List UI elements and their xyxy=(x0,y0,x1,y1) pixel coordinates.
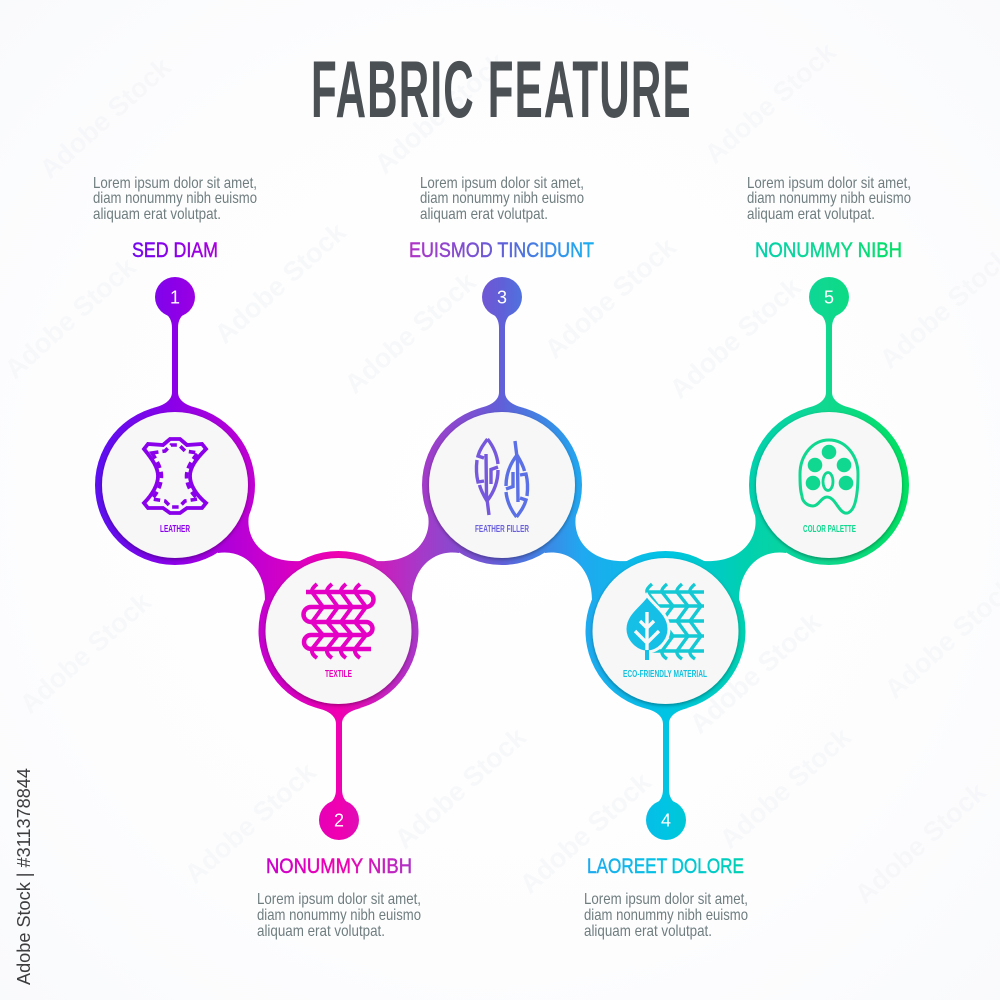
stock credit: Adobe Stock | #311378844 xyxy=(13,768,34,985)
heading 5: NONUMMY NIBH xyxy=(755,238,902,262)
icon: eco-friendly weave and leaf xyxy=(625,584,704,660)
stock watermarks: Adobe Stock xyxy=(389,721,532,854)
stock watermarks: Adobe Stock xyxy=(714,721,857,854)
text block 1: aliquam erat volutpat. xyxy=(93,206,221,223)
icon: paint palette xyxy=(800,440,858,513)
text block 2: aliquam erat volutpat. xyxy=(257,923,385,940)
text block 5: aliquam erat volutpat. xyxy=(747,206,875,223)
stock watermarks: Adobe Stock xyxy=(369,46,512,179)
panel: color palette xyxy=(756,412,902,558)
icon: feathers xyxy=(476,439,528,517)
text block 4: aliquam erat volutpat. xyxy=(584,923,712,940)
title: FABRIC FEATURE xyxy=(311,44,691,135)
text block 1: diam nonummy nibh euismo xyxy=(93,190,257,207)
heading 2: NONUMMY NIBH xyxy=(266,854,412,878)
heading 3: EUISMOD TINCIDUNT xyxy=(409,238,594,262)
label: leather: LEATHER xyxy=(160,523,190,535)
number 3: 3 xyxy=(497,288,507,308)
text block 3 xyxy=(420,175,584,223)
label: eco-friendly material: ECO-FRIENDLY MATERIAL xyxy=(623,668,707,680)
stock watermarks: Adobe Stock xyxy=(14,586,157,719)
icon: leather hide xyxy=(144,439,206,513)
number 5: 5 xyxy=(824,288,834,308)
panel: textile xyxy=(266,558,412,704)
icon: woven textile xyxy=(304,584,374,658)
number 1: 1 xyxy=(170,288,180,308)
panel: eco-friendly material xyxy=(592,558,738,704)
text block 3: diam nonummy nibh euismo xyxy=(420,190,584,207)
text block 4: Lorem ipsum dolor sit amet, xyxy=(584,891,748,908)
text block 4: diam nonummy nibh euismo xyxy=(584,907,748,924)
stock watermarks: Adobe Stock xyxy=(514,766,657,899)
stock watermarks: Adobe Stock xyxy=(209,216,352,349)
label: color palette: COLOR PALETTE xyxy=(803,523,856,535)
text block 1 xyxy=(93,175,257,223)
stock watermarks: Adobe Stock xyxy=(179,756,322,889)
panel: leather xyxy=(102,412,248,558)
text block 5: diam nonummy nibh euismo xyxy=(747,190,911,207)
heading 1: SED DIAM xyxy=(132,238,218,262)
text block 4 xyxy=(584,891,748,940)
timeline ribbon xyxy=(95,277,909,840)
text block 3: Lorem ipsum dolor sit amet, xyxy=(420,175,584,192)
stock watermarks: Adobe Stock xyxy=(849,776,992,909)
stock watermarks: Adobe Stock xyxy=(684,606,827,739)
panel: feather filler xyxy=(429,412,575,558)
stock watermarks: Adobe Stock xyxy=(699,36,842,169)
text block 5 xyxy=(747,175,911,223)
heading 4: LAOREET DOLORE xyxy=(587,854,744,878)
text block 1: Lorem ipsum dolor sit amet, xyxy=(93,175,257,192)
label: feather filler: FEATHER FILLER xyxy=(475,523,529,535)
text block 5: Lorem ipsum dolor sit amet, xyxy=(747,175,911,192)
stock watermarks: Adobe Stock xyxy=(0,251,142,384)
number 4: 4 xyxy=(661,810,671,830)
stock watermarks: Adobe Stock xyxy=(34,51,177,184)
text block 2: Lorem ipsum dolor sit amet, xyxy=(257,891,421,908)
number 2: 2 xyxy=(334,810,344,830)
text block 3: aliquam erat volutpat. xyxy=(420,206,548,223)
stock watermarks: Adobe Stock xyxy=(664,271,807,404)
text block 2 xyxy=(257,891,421,940)
stock watermarks: Adobe Stock xyxy=(539,231,682,364)
label: textile: TEXTILE xyxy=(325,668,352,680)
text block 2: diam nonummy nibh euismo xyxy=(257,907,421,924)
stock watermarks: Adobe Stock xyxy=(339,266,482,399)
